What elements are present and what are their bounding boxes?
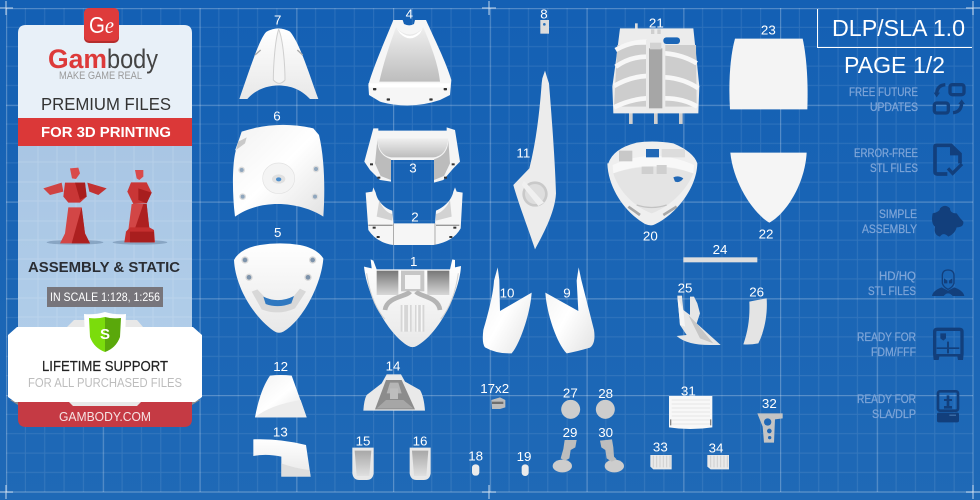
part 21: 21 [649,15,664,30]
banner: for 3D printing: FOR 3D PRINTING [41,125,171,141]
feature: free future updates: FREE FUTURE [849,87,918,99]
part 4: 4 [406,6,414,21]
panel: Gambody promo sidebar [8,8,202,427]
footer: gambody.com [18,400,192,427]
banner: for 3D printing [18,118,192,146]
part 30 [598,425,624,472]
footer: gambody.com: GAMBODY.COM [59,409,151,424]
part 5: 5 [274,225,281,240]
part 18: 18 [468,448,483,463]
feature: error-free stl files [854,145,962,175]
part 22 [730,153,807,241]
feature: ready for FDM/FFF: FDM/FFF [871,347,916,359]
icon: Ge logo badge [84,8,119,43]
feature: ready for FDM/FFF: READY FOR [857,332,916,344]
part 3: 3 [409,161,417,176]
part 34 [707,440,729,469]
part 30: 30 [598,425,613,440]
part 31 [669,383,712,429]
part 24 [683,242,757,262]
part 19 [517,449,531,476]
part 11: 11 [516,145,530,160]
part 9 [545,267,594,353]
icon: document with check [935,145,962,174]
part 20: 20 [643,229,658,244]
feature: simple assembly [862,206,963,237]
part 33: 33 [653,439,668,454]
text: make game real: MAKE GAME REAL [59,70,142,82]
part 7 [239,12,318,99]
label: in scale: IN SCALE 1:128, 1:256 [50,290,160,304]
feature: simple assembly: ASSEMBLY [862,224,917,236]
part 28 [596,386,615,419]
part 13: 13 [273,424,288,439]
feature: HD/HQ stl files: HD/HQ [879,271,916,283]
part 18 [468,448,483,476]
text: premium files: PREMIUM FILES [41,94,171,114]
part 27 [561,385,580,419]
icon: static figure [113,170,167,245]
text: assembly and static: ASSEMBLY & STATIC [28,260,181,276]
feature: ready for SLA/DLP: SLA/DLP [872,409,916,421]
part 2 [366,187,463,245]
part 6 [233,108,324,217]
part 21 [612,15,699,124]
part 32: 32 [762,396,777,411]
icon: green shield [84,312,126,356]
part 13 [253,424,311,477]
part 4 [368,6,451,105]
feature: error-free stl files: ERROR-FREE [854,148,918,160]
icon: Ge logo badge: Ge [89,12,114,38]
part 17x2: 17x2 [480,381,509,396]
part 34: 34 [709,440,724,455]
part 5 [234,225,323,333]
icon: helmet bust [932,270,964,296]
part 15 [352,433,374,480]
part 8: 8 [540,7,548,22]
part 29 [553,425,577,472]
part 16 [410,433,431,480]
part 23: 23 [761,23,776,38]
feature: simple assembly: SIMPLE [879,209,917,221]
icon: swap arrows [934,85,965,113]
icon: puzzle piece [932,206,963,237]
icon: assembly figure [43,168,107,245]
part 1 [364,254,461,347]
feature: HD/HQ stl files: STL FILES [868,286,916,298]
part 31: 31 [681,383,696,398]
feature: free future updates: UPDATES [870,102,918,114]
part 27: 27 [563,385,578,400]
part 14: 14 [386,358,401,373]
icon: green shield: S [100,326,110,343]
part 20 [607,141,697,244]
icon: SLA printer [937,391,959,422]
heading: page number: PAGE 1/2 [844,52,945,78]
part 24: 24 [713,242,728,257]
part 3 [364,127,460,183]
part 14 [363,358,425,411]
heading: Gambody wordmark: body [107,44,158,74]
part 12 [255,359,307,417]
part 6: 6 [273,108,281,123]
part 32 [757,396,783,443]
part 22: 22 [759,226,773,241]
part 17x2 [480,381,509,409]
part 9: 9 [563,285,571,300]
part 29: 29 [563,425,577,440]
part 33 [650,439,672,469]
part 11 [513,71,556,249]
part 10: 10 [500,285,514,300]
part 2: 2 [411,210,419,225]
part 26: 26 [749,284,764,299]
text: for all purchased files: FOR ALL PURCHASED FILES [28,376,182,390]
feature: error-free stl files: STL FILES [870,163,918,175]
panel: lifetime support ribbon [8,312,202,406]
label: in scale [47,287,163,307]
heading: Gambody wordmark [48,44,158,74]
panel: light header card [18,25,192,118]
heading: Gambody wordmark: Gam [48,44,107,74]
part 28: 28 [598,386,613,401]
part 25: 25 [678,280,692,295]
panel: blue figures area [18,146,192,336]
part 12: 12 [273,359,288,374]
heading: DLP/SLA version box: DLP/SLA 1.0 [832,15,965,41]
heading: DLP/SLA version box [818,9,972,48]
part 26 [743,284,767,345]
text: lifetime support: LIFETIME SUPPORT [42,359,168,375]
part 7: 7 [274,12,281,27]
part 16: 16 [413,433,427,448]
part 25 [677,280,721,345]
feature: ready for FDM/FFF [857,329,964,360]
feature: ready for SLA/DLP: READY FOR [857,394,916,406]
part 19: 19 [517,449,531,464]
part 15: 15 [356,433,370,448]
feature: HD/HQ stl files [868,270,964,298]
feature: ready for SLA/DLP [857,391,959,422]
part 10 [483,267,532,353]
part 23 [729,23,808,109]
part 1: 1 [410,254,417,269]
feature: free future updates [849,85,965,114]
icon: FDM printer [933,329,964,360]
part 8 [540,7,549,34]
